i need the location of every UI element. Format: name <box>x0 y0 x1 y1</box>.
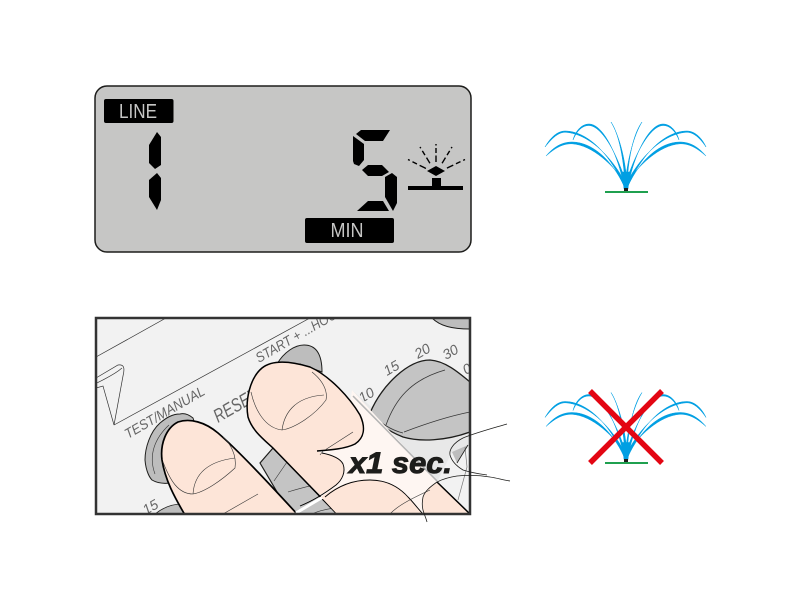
icon: incorrect water spray <box>545 391 706 464</box>
button: test manual <box>145 414 200 483</box>
label: MIN: MIN <box>330 220 364 242</box>
glare edge <box>353 396 437 481</box>
button: lower left <box>156 504 183 513</box>
dial numbers: 10 <box>356 384 377 406</box>
small knob wedge <box>452 445 468 463</box>
digit: 5 <box>353 130 397 211</box>
dial numbers: 20 <box>411 340 433 362</box>
label: LINE: LINE <box>119 101 157 123</box>
digit: 1 <box>149 132 161 210</box>
label: TEST/MANUAL: TEST/MANUAL <box>122 383 207 442</box>
white stripe <box>296 497 323 513</box>
dial numbers: 15 <box>380 357 402 379</box>
dial numbers: 0 <box>460 360 474 378</box>
finger: right <box>247 362 363 514</box>
label: RESET: RESET <box>210 385 263 427</box>
finger: lower right <box>321 480 470 514</box>
panel: LCD display <box>95 86 471 252</box>
red cross <box>590 391 662 463</box>
icon: sprinkler <box>408 144 465 190</box>
finger: left <box>162 420 298 515</box>
dial: large knob <box>370 360 470 440</box>
faceplate lines <box>96 318 310 425</box>
icon: correct water spray <box>545 122 706 193</box>
button: start <box>277 345 322 372</box>
gray slider between fingers <box>260 448 337 514</box>
dial numbers: 30 <box>440 341 461 363</box>
leader lines <box>422 424 510 522</box>
dial numbers <box>140 340 474 518</box>
callout text: x1 sec.: x1 sec. <box>347 447 452 480</box>
label: MIN <box>305 218 394 243</box>
callout veil: white glare <box>320 390 437 514</box>
panel: finger pressing buttons <box>96 302 510 522</box>
label: LINE <box>104 99 174 123</box>
panel border <box>96 318 470 514</box>
label: START + ...HOUR: START + ...HOUR <box>252 302 347 366</box>
button: top right knob <box>432 318 470 329</box>
veil: pale band beside knob <box>352 390 470 482</box>
dial numbers: 15 <box>140 496 161 518</box>
